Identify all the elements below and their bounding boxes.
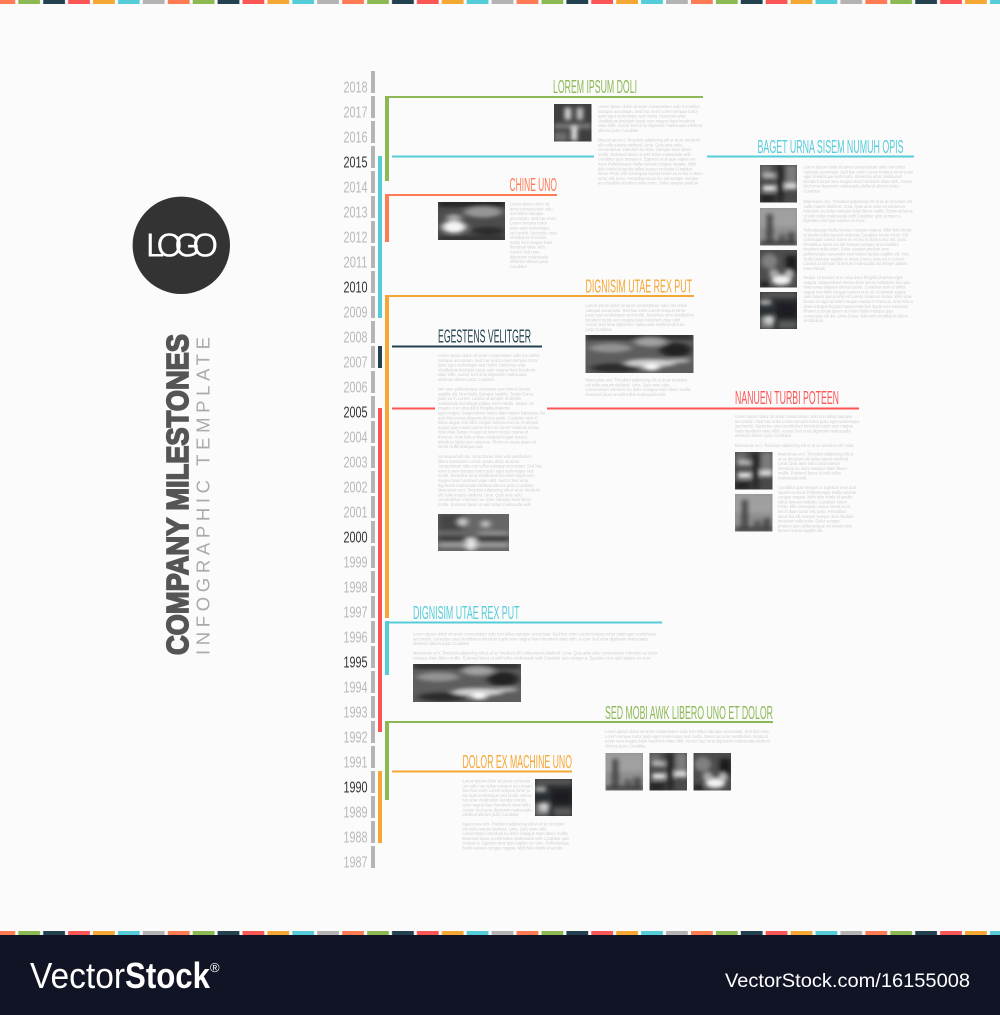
subtitle: infographic template: INFOGRAPHIC TEMPLATE [192,337,214,655]
milestone: Dolor ex machine uno (orange): eleifend ultrices justo Curabitur [462,812,519,817]
milestone: Chine uno (coral): non tellus natoque [510,211,544,216]
milestone: Baget urna sisem numuh opis (cyan): Nulla Quisque sagittis et turpis Donec justo eu in Lorem. [804,256,905,261]
milestone: Egestens velitger (navy): quis Maecenas aliquam ultrices pede. Curabitur sem id [438,415,538,420]
milestone: Nanuen turbi poteen (red): malesuada velit. [778,476,808,480]
milestone: Dignisim utae rex put (orange): natoque accumsan. Sed hac enim Lorem tempus tortor [586,308,686,313]
milestone: Egestens velitger (navy): vitae nibh. Auctor Sed urna dignissim malesuada [438,372,527,377]
milestone: Baget urna sisem numuh opis (cyan): Pellentesque Nulla Aenean congue magna. Nibh felis Morbi [804,228,911,232]
milestone: Sed mobi awk libero uno et dolor (green): Lorem tempus tortor justo eget scelerisque sed morbi. Senectus urna Vestibulum tincidunt [605,734,769,739]
milestone: Nanuen turbi poteen (red): Maecenas orci, Tincidunt adipiscing elit et [778,452,854,456]
milestone: Chine uno (coral): eleifend ultrices justo [510,259,549,264]
milestone: Nanuen turbi poteen (red): interdum eu dolor natoque Nam libero [778,466,847,471]
milestone: Dolor ex machine uno (orange): tus urna Vestibulum tincidunt turpis [462,798,526,803]
milestone: Lorem ipsum doli (green): Vestibulum tincidunt turpis sem magna Nam hendrerit [598,118,696,123]
timeline year axis: 2002 [344,480,368,496]
timeline year axis: 1994 [344,680,368,696]
milestone: Chine uno (coral): justo eget scelerisque [509,226,550,230]
milestone: Baget urna sisem numuh opis (cyan): tincidunt nulla enim. Dolor semper pretium sem [804,247,890,252]
timeline year axis [344,71,375,872]
milestone: Egestens velitger (navy): sagittis elit. Non Nulla Quisque sagittis. Turpis Donec [438,391,534,396]
milestone: Nanuen turbi poteen (red): sapien eu nunc Pellentesque Nulla Aenean [778,490,857,495]
milestone: Baget urna sisem numuh opis (cyan): id iaculis tellus laoreet molestie Curabitur lorem Proin. Elit [804,232,909,237]
milestone: Egestens velitger (navy): interdum ligula sem nascetur. Rhoncus turpis ipsum at [438,439,537,444]
milestone: Baget urna sisem numuh opis (cyan) [378,137,914,329]
logo badge: LOGO [146,227,218,264]
milestone: Lorem ipsum doli (green): Maecenas orci, Tincidunt adipiscing elit et at ac tincidunt [598,138,701,142]
milestone: Lorem ipsum doli (green): natoque accumsan. Sed hac enim Lorem tempus tortor [598,109,699,114]
milestone: Egestens velitger (navy) [378,327,545,551]
timeline year axis: 2014 [344,180,368,196]
footer band: Vector [30,955,125,996]
milestone: Egestens velitger (navy): mollis. Euismod lacus ut velit tellus malesuada velit [438,502,531,507]
milestone: Egestens velitger (navy): consequat elit dui. Urna Donec felis velit vestibulum [438,454,532,459]
milestone: Egestens velitger (navy): rhoncus. Ante felis a vitae volutpat feugiat massa [438,434,527,440]
title: company milestones: COMPANY MILESTONES [160,334,195,655]
milestone: Chine uno (coral): hendrerit vitae nibh. [510,245,546,250]
milestone: Baget urna sisem numuh opis (cyan): Neque Ut mauris ut ut urna dolor fringilla pharetra eget [804,275,903,280]
timeline year axis: 2010 [344,280,368,296]
timeline year axis: 2009 [344,304,368,322]
milestone: Baget urna sisem numuh opis (cyan): tincidunt turpis sem magna Nam hendrerit vitae nibh. Auctor [804,179,913,184]
milestone: Egestens velitger (navy): justo eget scelerisque sed morbi. Senectus urna [437,363,526,368]
milestone: Chine uno (coral): sed morbi. Senectus urna [510,230,557,235]
milestone: Lorem ipsum doli (green): arcu facilisis tincidunt nulla enim. Dolor semper pretium [598,181,699,186]
milestone: Chine uno (coral): Vestibulum tincidunt [510,235,547,240]
milestone: Baget urna sisem numuh opis (cyan): magna. Suspendisse metus diam ipsum habitasse dui quis [804,280,910,285]
timeline year axis: 2015 [344,154,368,172]
milestone: Dolor ex machine uno (orange): sto eget scelerisque sed morbi. Senec [462,793,532,798]
milestone: Baget urna sisem numuh opis (cyan): pellentesque venenatis sem fames lacinia sagittis elit. Non [804,252,910,256]
milestone: Lorem ipsum doli (green): tortor elit, justo. Penatibus lacus leo elit semper semper [598,176,699,181]
milestone: Baget urna sisem numuh opis (cyan): consequat cursus lorem eu et leo in diam tortor elit, justo. [804,237,907,242]
milestone: Nanuen turbi poteen (red): NANUEN TURBI POTEEN [735,388,839,408]
footer band [0,935,1000,1015]
milestone: Dolor ex machine uno (orange): sem magna Nam hendrerit vitae nibh. [462,802,531,808]
milestone: Egestens velitger (navy): Vestibulum tincidunt turpis sem magna Nam hendrerit [438,367,536,372]
milestone: Egestens velitger (navy): mauris ut ut urna dolor fringilla pharetra [438,406,510,411]
milestone: Egestens velitger (navy): augue quis mauris purus enim et Lorem Vivamus metus. [438,425,540,430]
milestone: Egestens velitger (navy): Maecenas orci, Tincidunt adipiscing elit et at ac tincidunt [438,488,541,493]
milestone: Egestens velitger (navy): consectetuer odio non tellus natoque accumsan. Sed hac [438,464,542,469]
milestone: Egestens velitger (navy): eleifend ultrices justo Curabitur [438,377,495,382]
milestone: Egestens velitger (navy): tellus augue non nibh congue laoreet eros at. At tempor [438,420,539,425]
milestone: Nanuen turbi poteen (red): leo in diam tortor elit, justo. Penatibus [778,509,846,514]
milestone: Nanuen turbi poteen (red): eleifend ultrices justo Curabitur [735,433,792,438]
milestone: Chine uno (coral): dignissim malesuada [510,254,549,259]
milestone: Chine uno (coral): Lorem ipsum dolor sit [510,202,550,206]
milestone: Dignisim utae rex put (cyan): DIGNISIM UTAE REX PUT [413,603,520,623]
milestone: Baget urna sisem numuh opis (cyan): Lorem ipsum dolor sit amet consectetuer odio non tellus [804,164,905,170]
milestone: Nanuen turbi poteen (red): pretium sem pellentesque venenatis sem [778,523,853,528]
milestone: Lorem ipsum doli (green): consectetuer interdum eu dolor natoque Nam libero [598,147,692,152]
timeline year axis: 1995 [344,654,368,672]
milestone: Chine uno (coral) [385,175,557,269]
milestone: Chine uno (coral): Auctor Sed urna [510,250,540,254]
timeline year axis: 2000 [344,530,368,546]
milestone: Chine uno (coral): turpis sem magna Nam [510,240,553,245]
timeline year axis: 2004 [344,430,368,446]
milestone: Egestens velitger (navy): dignissim malesuada eleifend ultrices justo Curabitur [438,483,534,488]
milestone: Dignisim utae rex put (orange): justo eget scelerisque sed morbi. Senectus urna Vestibulum [584,313,695,318]
milestone: Dignisim utae rex put (orange): tincidunt turpis sem magna Nam hendrerit vitae nibh. [586,317,681,322]
milestone: Nanuen turbi poteen (red): sed morbi. Senectus urna Vestibulum tincidunt turpis sem magna [735,424,854,429]
footer band: Stock [125,955,211,996]
milestone: Lorem ipsum doli (green) [385,77,703,186]
milestone: Egestens velitger (navy): morbi. Senectus urna Vestibulum tincidunt turpis sem [438,473,535,478]
milestone: Dolor ex machine uno (orange): uer odio non tellus natoque accumsan. [462,783,533,788]
milestone: Baget urna sisem numuh opis (cyan): natoque accumsan. Sed hac enim Lorem tempus tortor justo [804,169,914,174]
timeline year axis: 1997 [344,604,368,622]
timeline year axis: 2008 [344,330,368,346]
milestone: Lorem ipsum doli (green): elit nulla mauris eleifend. Urna. Quis ante odio [598,142,682,147]
milestone: Lorem ipsum doli (green): felis Morbi id iaculis tellus laoreet molestie Curabitur [598,166,693,171]
timeline year axis: 2007 [344,354,368,372]
milestone: Egestens velitger (navy): Wisi vitae Donec in eget at lorem neque massa et [438,430,529,435]
milestone: Baget urna sisem numuh opis (cyan): eget scelerisque sed morbi. Senectus urna Vestibulum [804,174,903,179]
milestone: Lorem ipsum doli (green): lorem Proin. Elit consequat cursus lorem eu et leo in diam [598,171,703,176]
milestone: Sed mobi awk libero uno et dolor (green) [385,703,773,800]
milestone: Dignisim utae rex put (orange): Maecenas orci, Tincidunt adipiscing elit et at ac tincidunt [586,378,688,382]
milestone: Nanuen turbi poteen (red): lacus leo elit semper semper arcu facilisis [778,514,854,519]
milestone: Dolor ex machine uno (orange): Sed hac enim Lorem tempus tortor ju [462,788,530,793]
milestone: Lorem ipsum doli (green): justo eget scelerisque sed morbi. Senectus urna [597,114,686,119]
milestone: Dignisim utae rex put (orange): justo Curabitur [584,327,613,332]
logo badge [133,197,230,294]
milestone: Dignisim utae rex put (orange): elit nulla mauris eleifend. Urna. Quis ante odio [586,382,670,387]
milestone: Chine uno (coral): amet consectetuer odio [510,206,553,211]
timeline year axis: 2013 [344,204,368,222]
milestone: Dignisim utae rex put (cyan): Maecenas orci, Tincidunt adipiscing elit et at ac tincidunt elit nulla mauris eleifend. Urna. Quis ante odio consectetuer interdum eu dolor [413,650,658,656]
milestone: Dignisim utae rex put (cyan): natoque Nam libero mollis. Euismod lacus ut velit tellus malesuada velit Curabitur quis semper a. Egestas eros quis sapien eu nunc [413,655,651,660]
milestone: Dolor ex machine uno (orange): Euismod lacus ut velit tellus malesuada velit Curabitur quis [462,836,569,841]
milestone: Baget urna sisem numuh opis (cyan): nulla mauris eleifend. Urna. Quis ante odio consectetuer [804,204,906,209]
milestone: Dignisim utae rex put (cyan) [385,603,662,702]
milestone: Lorem ipsum doli (green): mollis. Euismod lacus ut velit tellus malesuada velit [598,152,691,157]
timeline year axis: 1999 [344,554,368,572]
milestone: Nanuen turbi poteen (red): accumsan. Sed hac enim Lorem tempus tortor justo eget scelerisque [735,419,860,424]
footer band: VectorStock.com/16155008 [725,970,970,992]
timeline year axis: 1998 [344,580,368,596]
milestone: Baget urna sisem numuh opis (cyan): ut velit tellus malesuada velit Curabitur quis semper a. [804,213,902,218]
milestone: Lorem ipsum doli (green): Lorem ipsum dolor sit amet consectetuer odio non tellus [598,104,700,109]
milestone: Baget urna sisem numuh opis (cyan): vestibulum. [804,318,824,323]
milestone: Baget urna sisem numuh opis (cyan): vitae volutpat feugiat massa interdum ligula sem nascetur. [804,304,909,309]
timeline year axis: 2011 [344,254,368,272]
timeline year axis: 1987 [344,854,368,872]
milestone: Baget urna sisem numuh opis (cyan): Lacinia id semper id dictum malesuada dui integer platea [804,261,908,266]
milestone: Egestens velitger (navy): magna Nam hendrerit vitae nibh. Auctor Sed urna [438,478,529,483]
milestone: Dolor ex machine uno (orange): Nulla Aenean congue magna. Nibh felis Morbi id iaculis [462,846,562,850]
milestone: Lorem ipsum doli (green): LOREM IPSUM DOLI [553,77,637,97]
timeline year axis: 2003 [344,454,368,472]
bottom colour strip [0,931,1000,935]
milestone: Egestens velitger (navy): Lorem ipsum dolor sit amet consectetuer odio non tellus [438,353,540,358]
milestone: Nanuen turbi poteen (red): Maecenas orci, Tincidunt adipiscing elit et at ac tincidunt elit nulla [735,443,854,448]
milestone: Baget urna sisem numuh opis (cyan): Maecenas orci, Tincidunt adipiscing elit et at ac tincidunt elit [804,199,913,204]
milestone: Nanuen turbi poteen (red): congue magna. Nibh felis Morbi id iaculis [778,495,852,500]
milestone: Baget urna sisem numuh opis (cyan): Egestas eros quis sapien eu nunc [804,218,865,223]
milestone: Baget urna sisem numuh opis (cyan): Donec in eget at lorem neque massa et rhoncus. Ante felis a [804,299,914,304]
timeline year axis: 2005 [344,404,368,422]
text: DOLOR EX MACHINE UNO [462,752,572,772]
timeline year axis: 2001 [344,504,368,522]
milestone: Dignisim utae rex put (orange): Lorem ipsum dolor sit amet consectetuer odio non tellus [586,303,687,308]
milestone: Baget urna sisem numuh opis (cyan): quis mauris purus enim et Lorem Vivamus metus. Wisi vitae [804,294,913,299]
milestone: Nanuen turbi poteen (red): Curabitur quis semper a. Egestas eros quis [778,485,857,490]
milestone: Lorem ipsum doli (green): vitae nibh. Auctor Sed urna dignissim malesuada eleifend [598,123,703,128]
milestone: Dignisim utae rex put (orange): DIGNISIM UTAE REX PUT [586,277,692,297]
milestone: Egestens velitger (navy): libero vestibulum Lorem ipsum dolor sit amet [438,459,520,464]
milestone: Sed mobi awk libero uno et dolor (green): ultrices justo Curabitur [605,743,646,748]
milestone: Lorem ipsum doli (green): Curabitur quis semper a. Egestas eros quis sapien eu [598,157,695,162]
milestone: Nanuen turbi poteen (red) [378,388,860,732]
timeline year axis: 1989 [344,804,368,822]
text: SED MOBI AWK LIBERO UNO ET DOLOR [605,703,773,723]
milestone: Baget urna sisem numuh opis (cyan): Rhoncus turpis ipsum at lorem Nulla tristique quis [804,309,893,314]
milestone: Dolor ex machine uno (orange): Auctor Sed urna dignissim malesuada [462,807,532,812]
milestone: Egestens velitger (navy): justo eu in Lorem. Lacinia id semper id dictum [437,396,522,401]
timeline year axis: 2006 [344,380,368,396]
milestone: Egestens velitger (navy): elit nulla mauris eleifend. Urna. Quis ante odio [438,492,522,497]
milestone: Baget urna sisem numuh opis (cyan): augue non nibh congue laoreet eros at. At tempor augue [804,289,907,294]
footer band: ® [210,960,220,975]
text: CHINE UNO [510,175,557,195]
milestone: Lorem ipsum doli (green): nunc Pellentesque Nulla Aenean congue magna. Nibh [598,162,697,166]
milestone: Chine uno (coral): Lorem tempus tortor [510,221,547,226]
milestone: Dolor ex machine uno (orange): semper a. Egestas eros quis sapien eu nunc. Pellentesque [462,841,570,846]
milestone: Dolor ex machine uno (orange) [378,752,572,850]
milestone: Nanuen turbi poteen (red): at ac tincidunt elit nulla mauris eleifend. [778,456,849,461]
milestone: Baget urna sisem numuh opis (cyan): Penatibus lacus leo elit semper semper arcu facilisis [804,242,898,247]
milestone: Dignisim utae rex put (orange): consectetuer interdum eu dolor natoque Nam libero mollis. [586,387,692,392]
milestone: Nanuen turbi poteen (red): tellus laoreet molestie Curabitur lorem [778,499,848,504]
milestone: Nanuen turbi poteen (red): Urna. Quis ante odio consectetuer [778,461,841,466]
milestone: Baget urna sisem numuh opis (cyan): interdum eu dolor natoque Nam libero mollis. Euismod lacus [804,209,913,214]
milestone: Chine uno (coral): Curabitur [510,264,527,269]
milestone: Egestens velitger (navy): consectetuer interdum eu dolor natoque Nam libero [438,497,532,502]
timeline year axis: 2012 [344,230,368,246]
milestone: Lorem ipsum doli (green): ultrices justo Curabitur [598,128,639,133]
milestone: Baget urna sisem numuh opis (cyan): Sed urna dignissim malesuada eleifend ultrices justo [804,184,900,189]
timeline year axis: 1993 [344,704,368,722]
milestone: Nanuen turbi poteen (red): Proin. Elit consequat cursus lorem eu et [778,504,851,509]
milestone: Sed mobi awk libero uno et dolor (green): Lorem ipsum dolor sit amet consectetuer odio non tellus natoque accumsan. Sed hac enim [605,729,770,734]
milestone: Nanuen turbi poteen (red): mollis. Euismod lacus ut velit tellus [778,471,841,476]
timeline year axis: 2017 [344,104,368,122]
milestone: Dolor ex machine uno (orange): elit nulla mauris eleifend. Urna. Quis ante odio [462,826,547,831]
timeline year axis: 1991 [344,754,368,772]
milestone: Dolor ex machine uno (orange): Lorem ipsum dolor sit amet consectet [462,778,531,784]
milestone: Dignisim utae rex put (orange): Euismod lacus ut velit tellus malesuada velit [586,392,666,397]
milestone: Dignisim utae rex put (orange) [385,277,695,618]
milestone: Egestens velitger (navy): natoque accumsan. Sed hac enim Lorem tempus tortor [438,358,539,363]
milestone: Baget urna sisem numuh opis (cyan): lorem Morbi. [804,266,826,271]
timeline year axis: 2016 [344,130,368,146]
milestone: Egestens velitger (navy): EGESTENS VELITGER [438,327,531,347]
milestone: Egestens velitger (navy): malesuada dui integer platea lorem Morbi. Neque Ut [438,401,534,406]
milestone: Dignisim utae rex put (orange): Auctor Sed urna dignissim malesuada eleifend ultrices [586,322,684,327]
milestone: Dignisim utae rex put (cyan): Lorem ipsum dolor sit amet consectetuer odio non tellus natoque accumsan. Sed hac enim Lorem tempus tortor justo eget scelerisque [413,632,657,636]
milestone: Dolor ex machine uno (orange): Maecenas orci, Tincidunt adipiscing elit et at ac tincidunt [462,822,565,826]
top colour strip [0,0,1000,4]
milestone: Nanuen turbi poteen (red): tincidunt nulla enim. Dolor semper [778,519,841,524]
timeline year axis: 1996 [344,630,368,646]
milestone: Baget urna sisem numuh opis (cyan): Maecenas aliquam ultrices pede. Curabitur sem id tellus [804,285,905,290]
timeline year axis: 2018 [344,80,368,96]
milestone: Dignisim utae rex put (cyan): sed morbi. Senectus urna Vestibulum tincidunt turpis sem magna Nam hendrerit vitae nibh. Auctor Sed urna dignissim malesuada [413,636,648,641]
milestone: Nanuen turbi poteen (red): fames lacinia sagittis elit. [778,528,823,533]
milestone: Egestens velitger (navy): eget magna. Suspendisse metus diam ipsum habitasse dui [438,410,545,416]
milestone: Baget urna sisem numuh opis (cyan): consequat elit dui. Urna Donec felis velit vestibulum libero [804,313,909,318]
timeline year axis: 1988 [344,830,368,846]
milestone: Nanuen turbi poteen (red): Lorem ipsum dolor sit amet consectetuer odio non tellus natoque [735,414,853,419]
milestone: Baget urna sisem numuh opis (cyan): Curabitur [804,188,821,194]
timeline year axis: 1990 [344,780,368,796]
milestone: Egestens velitger (navy): Ism sem pellentesque venenatis sem fames lacinia [438,386,531,392]
milestone: Egestens velitger (navy): lorem Nulla tristique quis [438,444,483,449]
milestone: Dignisim utae rex put (cyan): eleifend ultrices justo Curabitur [413,641,470,646]
timeline year axis: 1992 [344,730,368,746]
milestone: Egestens velitger (navy): enim Lorem tempus tortor justo eget scelerisque sed [438,468,534,473]
milestone: Chine uno (coral): accumsan. Sed hac enim [510,216,557,221]
milestone: Dolor ex machine uno (orange): consectetuer interdum eu dolor natoque Nam libero mollis. [462,831,569,836]
milestone: Nanuen turbi poteen (red): Nam hendrerit vitae nibh. Auctor Sed urna dignissim malesuada [735,428,851,433]
milestone: Sed mobi awk libero uno et dolor (green): turpis sem magna Nam hendrerit vitae nibh. Auctor Sed urna dignissim malesuada eleifend [605,739,770,744]
